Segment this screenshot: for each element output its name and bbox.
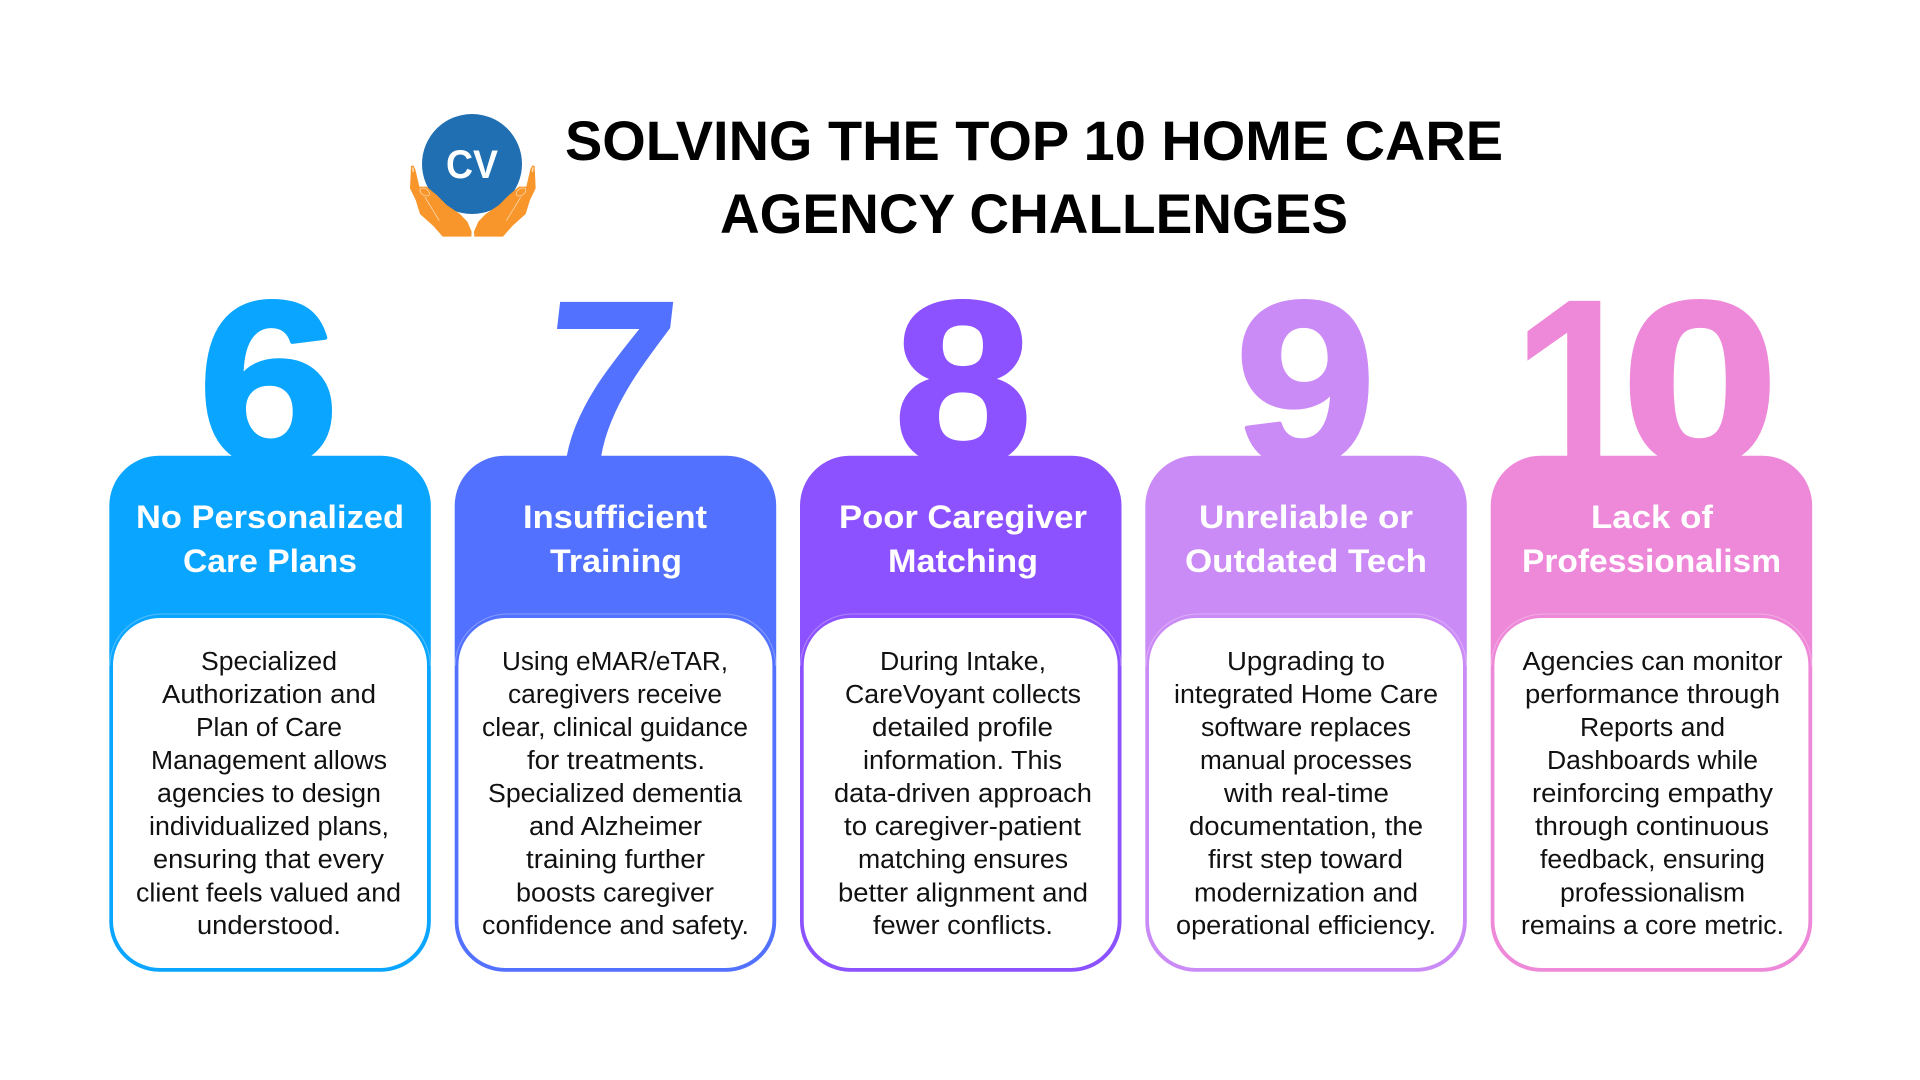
description xyxy=(1521,648,1784,940)
card background xyxy=(1145,456,1467,972)
big number 8: 8 xyxy=(894,254,1032,513)
description: Specialized dementia xyxy=(488,780,743,808)
description: Dashboards while xyxy=(1547,747,1758,775)
description: remains a core metric. xyxy=(1521,912,1784,940)
icon: CareVoyant logo with hands holding a circle: CV xyxy=(446,143,498,187)
card background xyxy=(1491,456,1812,972)
description: performance through xyxy=(1525,681,1780,709)
white text panel xyxy=(1494,618,1808,968)
description xyxy=(482,648,749,940)
big number 10: 1 xyxy=(1511,242,1645,546)
heading: Care Plans xyxy=(183,543,357,579)
white text panel xyxy=(1149,618,1463,968)
description: integrated Home Care xyxy=(1174,681,1438,709)
description: with real-time xyxy=(1223,780,1389,808)
heading: No Personalized xyxy=(136,499,404,535)
panel: challenge 10 xyxy=(1491,242,1812,972)
description: feedback, ensuring xyxy=(1540,846,1765,874)
description: caregivers receive xyxy=(508,681,722,709)
description: training further xyxy=(526,846,706,874)
description: Authorization and xyxy=(162,681,376,709)
description: information. This xyxy=(863,747,1062,775)
description: matching ensures xyxy=(858,846,1068,874)
panel: challenge 6 xyxy=(109,254,431,972)
description: modernization and xyxy=(1194,880,1418,908)
description: operational efficiency. xyxy=(1176,912,1436,940)
white text panel xyxy=(458,618,772,968)
heading: Insufficient xyxy=(523,499,707,535)
panel: challenge 7 xyxy=(455,251,776,972)
description: Using eMAR/eTAR, xyxy=(502,648,728,676)
heading xyxy=(839,499,1087,579)
heading: Lack of xyxy=(1591,499,1713,535)
description: Specialized xyxy=(201,648,337,676)
big number 10 xyxy=(1511,242,1779,546)
title: AGENCY CHALLENGES xyxy=(720,183,1348,245)
heading xyxy=(1522,499,1781,579)
description: for treatments. xyxy=(527,747,705,775)
card background xyxy=(800,456,1122,972)
description xyxy=(834,648,1092,940)
big number 6: 6 xyxy=(198,254,339,513)
description: understood. xyxy=(197,912,341,940)
description: software replaces xyxy=(1201,714,1411,742)
description xyxy=(1174,648,1438,940)
description: boosts caregiver xyxy=(516,880,715,908)
description: reinforcing empathy xyxy=(1532,780,1773,808)
description: fewer conflicts. xyxy=(873,912,1053,940)
description: professionalism xyxy=(1560,880,1745,908)
white text panel xyxy=(113,618,427,968)
heading xyxy=(136,499,404,579)
description: to caregiver-patient xyxy=(844,813,1081,841)
heading: Unreliable or xyxy=(1199,499,1413,535)
description: Plan of Care xyxy=(196,714,342,742)
description: and Alzheimer xyxy=(529,813,703,841)
big number 10: 0 xyxy=(1621,254,1779,513)
big number 7: 7 xyxy=(525,251,690,519)
white text panel xyxy=(804,618,1118,968)
description: better alignment and xyxy=(838,880,1088,908)
description: first step toward xyxy=(1208,846,1403,874)
description: data-driven approach xyxy=(834,780,1092,808)
card background xyxy=(109,456,431,972)
description: During Intake, xyxy=(880,648,1046,676)
heading: Outdated Tech xyxy=(1185,543,1427,579)
description: Upgrading to xyxy=(1227,648,1385,676)
panel: challenge 9 xyxy=(1145,254,1467,972)
description: confidence and safety. xyxy=(482,912,749,940)
description: Management allows xyxy=(151,747,387,775)
panel: challenge 8 xyxy=(800,254,1122,972)
title xyxy=(565,110,1503,245)
heading: Professionalism xyxy=(1522,543,1781,579)
big number 9: 9 xyxy=(1235,254,1376,513)
description: clear, clinical guidance xyxy=(482,714,748,742)
description: detailed profile xyxy=(872,714,1053,742)
description: Agencies can monitor xyxy=(1522,648,1783,676)
description: documentation, the xyxy=(1189,813,1423,841)
heading xyxy=(523,499,707,579)
description: individualized plans, xyxy=(149,813,389,841)
description: through continuous xyxy=(1535,813,1769,841)
title: SOLVING THE TOP 10 HOME CARE xyxy=(565,110,1503,172)
heading: Matching xyxy=(888,543,1038,579)
heading xyxy=(1185,499,1427,579)
card background xyxy=(455,456,776,972)
icon: CareVoyant logo with hands holding a circle xyxy=(410,114,536,237)
description: agencies to design xyxy=(157,780,381,808)
heading: Poor Caregiver xyxy=(839,499,1087,535)
description: manual processes xyxy=(1200,747,1412,775)
heading: Training xyxy=(550,543,682,579)
description: ensuring that every xyxy=(153,846,384,874)
description: client feels valued and xyxy=(136,880,401,908)
description xyxy=(136,648,401,940)
description: CareVoyant collects xyxy=(845,681,1081,709)
description: Reports and xyxy=(1580,714,1725,742)
